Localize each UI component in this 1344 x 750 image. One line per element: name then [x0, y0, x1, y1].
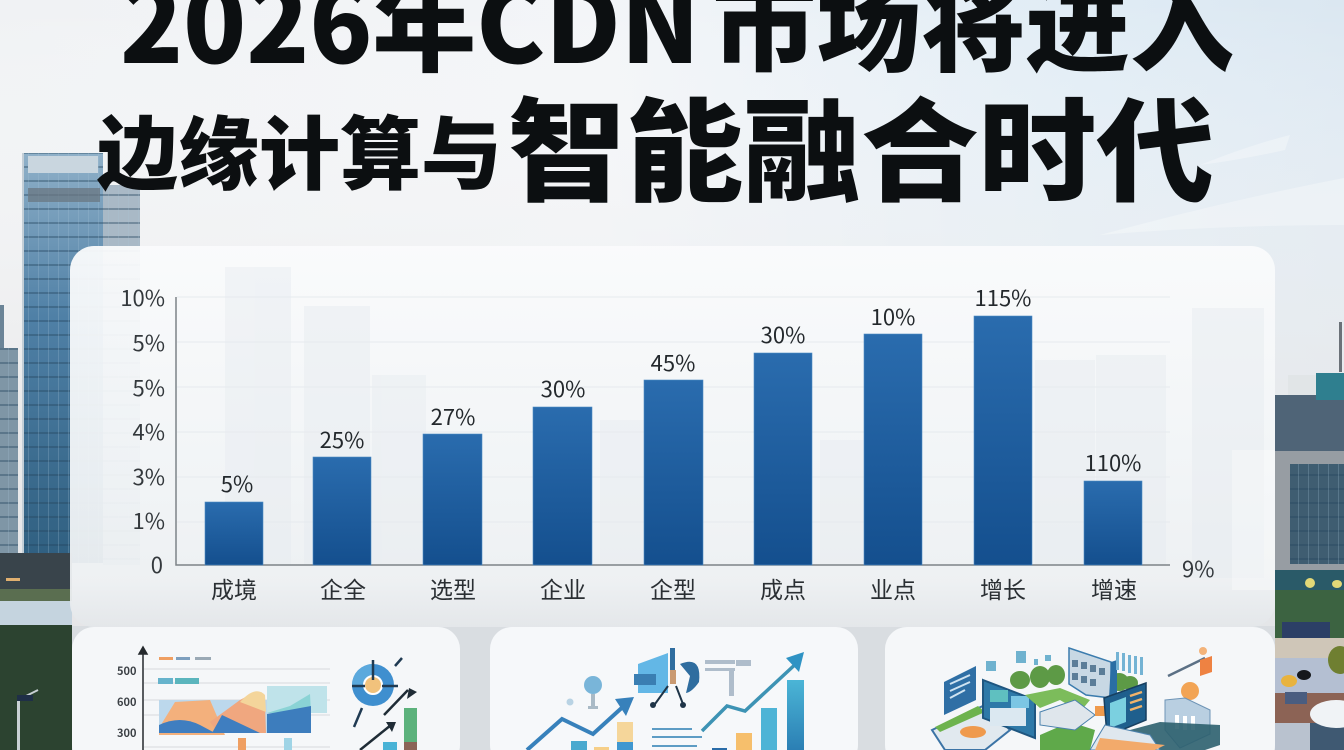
y axis labels: 4% [133, 415, 165, 447]
y axis labels: 5% [133, 326, 165, 358]
T shaped bars [705, 660, 751, 696]
bar value labels [221, 281, 1141, 499]
green ground [1025, 688, 1090, 712]
y axis labels: 3% [133, 460, 165, 492]
axes [176, 297, 1170, 565]
left towers [0, 153, 140, 750]
axis labels: 300 [117, 725, 136, 741]
left small bars [571, 722, 633, 750]
bar value labels: 10% [871, 300, 915, 332]
y axis labels: 0 [151, 548, 163, 580]
y axis labels: 5% [133, 371, 165, 403]
panel: isometric edge city card [885, 627, 1275, 750]
bars [205, 316, 1142, 565]
axis labels [117, 663, 136, 741]
right arrow line [702, 660, 800, 731]
mini text lines [652, 728, 702, 747]
small bars [238, 708, 417, 750]
trees [1010, 665, 1138, 691]
legend swatches [158, 657, 211, 684]
category labels: 成境 [211, 571, 257, 605]
area chart [159, 686, 327, 735]
panel: area chart card [72, 627, 460, 750]
category labels: 企型 [650, 571, 696, 605]
bar value labels: 30% [541, 372, 585, 404]
pale white building [1232, 450, 1275, 590]
road strip between cards [72, 626, 1275, 750]
small floating icons [986, 651, 1051, 671]
category labels: 增速 [1091, 571, 1137, 605]
category labels: 增长 [980, 571, 1026, 605]
axis arrow [139, 647, 147, 750]
left arrow line [527, 704, 626, 750]
bar value labels: 25% [320, 423, 364, 455]
faded skyline inside panel [225, 267, 1264, 578]
bar value labels: 110% [1085, 446, 1141, 478]
second monitor [1104, 683, 1146, 736]
base platform left [932, 705, 1010, 750]
office tower [1069, 648, 1117, 698]
category labels: 成点 [760, 571, 806, 605]
bar value labels: 30% [761, 318, 805, 350]
category labels: 选型 [430, 571, 476, 605]
gear icon [352, 658, 417, 750]
middle roof [1040, 700, 1095, 730]
title line 2 small part: 边缘计算与 [97, 91, 502, 207]
title [97, 0, 1234, 225]
y axis labels [120, 281, 165, 580]
bar value labels: 5% [221, 467, 253, 499]
right axis label: 9% [1182, 552, 1214, 584]
bulb server [1165, 682, 1210, 748]
title line 2 large part: 智能融合时代 [508, 63, 1214, 225]
right bars [712, 680, 804, 750]
panel: growth card [490, 627, 858, 750]
category labels: 企全 [320, 571, 366, 605]
grid lines [144, 669, 330, 747]
category labels: 业点 [870, 571, 916, 605]
axis labels: 600 [117, 694, 136, 710]
barcode [1116, 652, 1143, 675]
right buildings [1275, 322, 1344, 750]
gridlines [177, 297, 1170, 522]
main monitor [983, 680, 1035, 738]
floating screen [944, 666, 976, 715]
y axis labels: 1% [133, 504, 165, 536]
base platform right [1110, 722, 1220, 750]
central machine icon [634, 648, 699, 708]
bar value labels: 27% [431, 400, 475, 432]
panel: bar chart [70, 246, 1275, 627]
category labels [211, 571, 1137, 605]
y axis labels: 10% [120, 281, 165, 313]
category labels: 企业 [540, 571, 586, 605]
bar value labels: 115% [975, 281, 1031, 313]
bar value labels: 45% [651, 346, 695, 378]
person with pointer [1168, 647, 1212, 676]
pin icon [566, 676, 602, 709]
axis labels: 500 [117, 663, 136, 679]
